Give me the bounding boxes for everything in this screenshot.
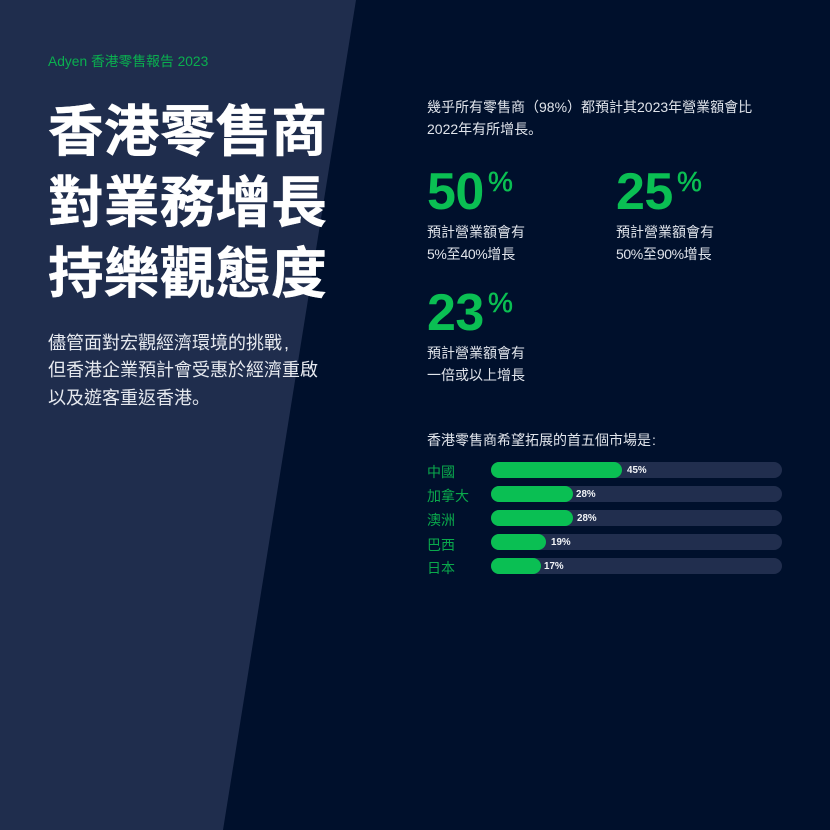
bar: Australia xyxy=(427,510,782,528)
stat: 50%: 預計營業額會有 xyxy=(427,224,525,240)
stat: 25%: 預計營業額會有 xyxy=(616,224,714,240)
intro text: 儘管面對宏觀經濟環境的挑戰, xyxy=(48,333,289,353)
stat: 23%: 一倍或以上增長 xyxy=(427,367,525,383)
stat: 50% xyxy=(427,163,525,262)
stat: 50%: 50 xyxy=(427,163,484,221)
stat: 23%: % xyxy=(488,287,513,318)
bar: China: 中國 xyxy=(427,464,455,480)
stat: 25% xyxy=(616,163,714,262)
bar chart: top five markets xyxy=(427,462,782,576)
bar: Canada xyxy=(427,486,782,504)
intro text: 以及遊客重返香港。 xyxy=(48,384,210,410)
title: 對業務增長 xyxy=(48,170,327,234)
intro text: 但香港企業預計會受惠於經濟重啟 xyxy=(48,360,318,380)
bar: Japan: 日本 xyxy=(427,560,455,576)
intro text xyxy=(48,333,318,410)
stat: 23%: 預計營業額會有 xyxy=(427,345,525,361)
summary text: 2022年有所增長。 xyxy=(427,119,542,139)
chart heading: 香港零售商希望拓展的首五個市場是: xyxy=(427,432,656,448)
summary text: 幾乎所有零售商（98%）都預計其2023年營業額會比 xyxy=(427,99,752,115)
stat: 23%: 23 xyxy=(427,284,484,342)
bar: Japan xyxy=(427,558,782,576)
bar: China xyxy=(427,462,782,480)
stat: 23% xyxy=(427,284,525,383)
bar: China: 45% xyxy=(627,465,647,476)
summary text xyxy=(427,99,752,139)
title: 持樂觀態度 xyxy=(48,242,327,304)
bar: Australia: 澳洲 xyxy=(427,512,455,528)
bar: Brazil: 巴西 xyxy=(427,537,455,553)
bar: Canada: 28% xyxy=(576,489,596,500)
title xyxy=(48,100,327,304)
stat: 25%: 50%至90%增長 xyxy=(616,246,712,262)
title: 香港零售商 xyxy=(48,100,327,162)
stat: 50%: % xyxy=(488,166,513,197)
bar: Japan: 17% xyxy=(544,561,564,572)
stat: 50%: 5%至40%增長 xyxy=(427,246,515,262)
bar: Canada: 加拿大 xyxy=(427,488,469,504)
eyebrow: Adyen 香港零售報告 2023 xyxy=(48,54,208,69)
bar: Australia: 28% xyxy=(577,513,597,524)
stat: 25%: % xyxy=(677,166,702,197)
stat: 25%: 25 xyxy=(616,163,673,221)
bar: Brazil xyxy=(427,534,782,553)
bar: Brazil: 19% xyxy=(551,537,571,548)
